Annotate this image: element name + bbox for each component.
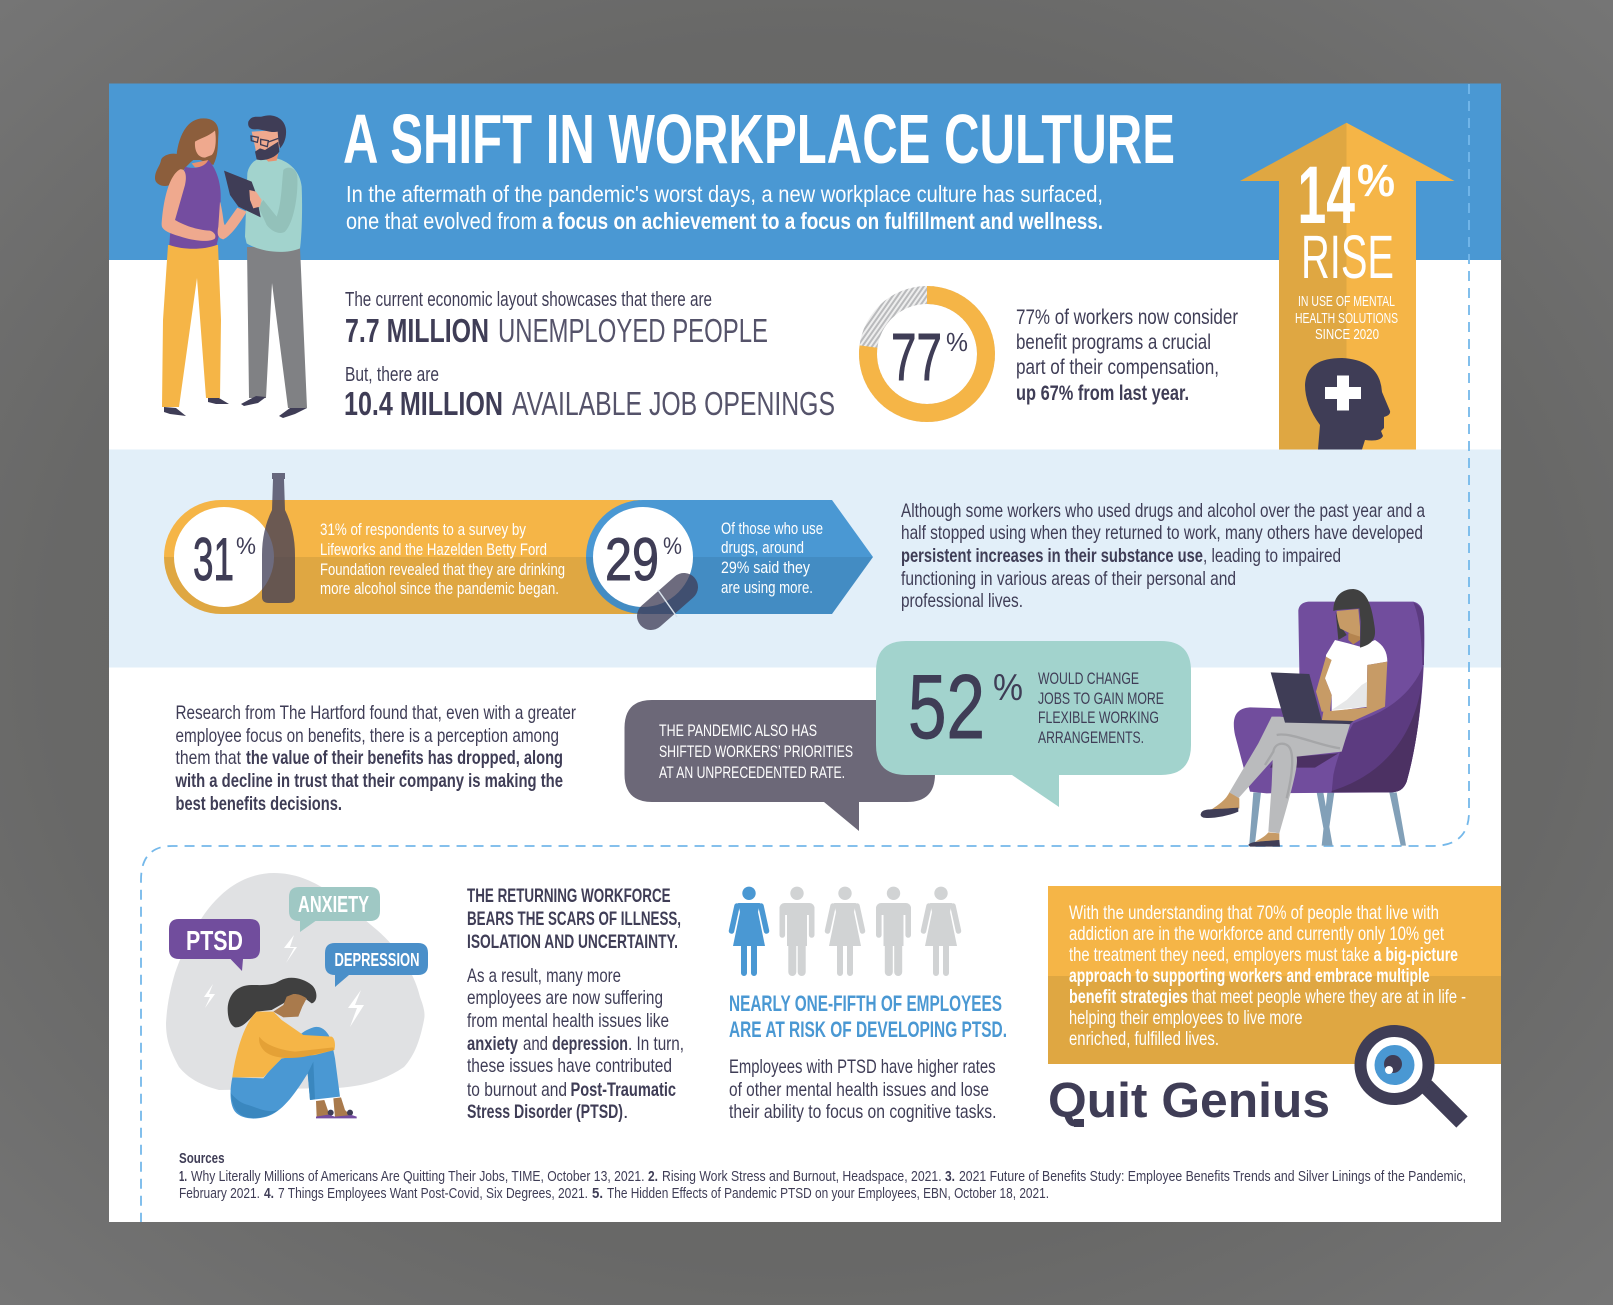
icon row: five people, one highlighted [732, 887, 958, 973]
stat: job market: AVAILABLE JOB OPENINGS [512, 385, 835, 422]
blob [166, 873, 425, 1090]
callout: ptsd: PTSD [186, 925, 243, 956]
text: substance use: , leading to impaired [1203, 545, 1341, 567]
text: 31% of respondents: Foundation revealed that they are drinking [320, 560, 565, 579]
text: sources: The Hidden Effects of Pandemic PTSD on your Employees, EBN, October 18, 2021. [607, 1185, 1049, 1202]
person: grey man [876, 887, 911, 972]
dashed connector line [141, 84, 1469, 1222]
person: grey woman [924, 887, 958, 973]
callout: anxiety: ANXIETY [298, 891, 369, 917]
panel: big-picture approach: that meet people where they are at in life - [1192, 987, 1466, 1008]
text: sources: 5. [592, 1185, 603, 1202]
arrow: 14% rise: % [1357, 155, 1395, 206]
text: substance use: functioning in various areas of their personal and [901, 568, 1236, 590]
text: returning workforce [467, 885, 684, 1123]
body: . In turn, [628, 1033, 684, 1055]
text: the Hartford research: the value of their benefits has dropped, along [246, 747, 563, 769]
arrow: 14% rise: HEALTH SOLUTIONS [1295, 310, 1398, 327]
callout: pandemic priorities [624, 700, 935, 831]
panel: big-picture approach: approach to supporting workers and embrace multiple [1069, 966, 1430, 987]
text: 31% of respondents: more alcohol since the pandemic began. [320, 579, 559, 598]
body: anxiety [467, 1033, 518, 1055]
person: blue woman [732, 887, 766, 973]
body: Stress Disorder (PTSD) [467, 1101, 623, 1123]
text: sources: 3. [945, 1168, 955, 1185]
text: sources: Rising Work Stress and Burnout, Headspace, 2021. [662, 1168, 942, 1185]
text: substance use: half stopped using when they returned to work, many others have developed [901, 522, 1423, 544]
text: the Hartford research [175, 702, 576, 815]
callout: 52% [876, 641, 1191, 807]
icon: capsule [651, 587, 684, 617]
panel: big-picture approach: the treatment they need, employers must take [1069, 945, 1370, 966]
panel: big-picture approach [1048, 886, 1501, 1064]
text: the Hartford research: with a decline in trust that their company is making the [175, 770, 563, 792]
arrow: 14% rise: RISE [1301, 223, 1394, 291]
callout: 52%: % [993, 667, 1023, 708]
body: . [623, 1101, 628, 1123]
callout: depression: DEPRESSION [334, 950, 420, 970]
text: sources: 4. [264, 1185, 274, 1202]
person: grey woman [828, 887, 862, 973]
icon: bottle [262, 473, 295, 603]
text: the Hartford research: employee focus on benefits, there is a perception among [176, 725, 559, 747]
text: sources: February 2021. [179, 1185, 260, 1202]
arrow: 14% rise: SINCE 2020 [1315, 326, 1379, 343]
callout: 52%: FLEXIBLE WORKING [1038, 708, 1159, 727]
circle: 31%: 31 [193, 526, 234, 593]
text: one-fifth of employees: ARE AT RISK OF DEVELOPING PTSD. [729, 1017, 1007, 1042]
callout: pandemic priorities: SHIFTED WORKERS’ PRIORITIES [659, 742, 853, 761]
panel: infographic card [109, 84, 1501, 1222]
person: grey man [780, 887, 814, 972]
stat: job market: UNEMPLOYED PEOPLE [498, 312, 768, 349]
panel: big-picture approach: a big-picture [1374, 945, 1458, 966]
text: of those who use: Of those who use [721, 519, 823, 538]
text: the Hartford research: best benefits decisions. [176, 793, 342, 815]
icon: head with plus [1305, 358, 1390, 450]
text: 31% of respondents: Lifeworks and the Hazelden Betty Ford [320, 540, 547, 559]
heading: ISOLATION AND UNCERTAINTY. [467, 931, 678, 953]
stat: job market: The current economic layout showcases that there are [345, 289, 712, 311]
body: from mental health issues like [467, 1010, 669, 1032]
circle: 31%: % [236, 533, 256, 560]
text: of those who use: 29% said they [721, 558, 810, 577]
text: 31% of respondents [320, 520, 565, 598]
callout: pandemic priorities: THE PANDEMIC ALSO HAS [659, 721, 817, 740]
panel: 29% drugs arrow [586, 500, 873, 617]
person [1201, 589, 1387, 847]
woman [155, 118, 247, 416]
text: 77% of workers: part of their compensation, [1016, 356, 1219, 379]
chart: 77% donut [868, 295, 986, 413]
text: the Hartford research: them that [176, 747, 241, 769]
panel: big-picture approach: helping their employees to live more [1069, 1008, 1302, 1029]
chart: 77% donut: % [946, 327, 968, 357]
figure [228, 978, 357, 1119]
stat: job market: 10.4 MILLION [344, 385, 503, 422]
text: the Hartford research: Research from The Hartford found that, even with a greater [176, 702, 576, 724]
chart: 77% donut: 77 [891, 320, 942, 395]
panel: header band [109, 84, 1501, 260]
callout: 52%: 52 [908, 657, 985, 758]
stat: job market [344, 289, 835, 422]
illustration: couple with tablet [155, 115, 307, 418]
text: sources [179, 1150, 1466, 1202]
circle: 31% [174, 507, 274, 607]
circle: 29%: 29 [605, 526, 659, 593]
text: of those who use [721, 519, 823, 597]
arrow: 14% rise [1240, 123, 1454, 449]
text: substance use: Although some workers who used drugs and alcohol over the past year and a [901, 500, 1425, 522]
text: sources: 1. [179, 1168, 187, 1185]
panel: big-picture approach: enriched, fulfilled lives. [1069, 1029, 1219, 1050]
callout: anxiety [289, 887, 380, 932]
stat: job market: But, there are [345, 364, 439, 386]
text: of those who use: are using more. [721, 578, 813, 597]
panel: big-picture approach: benefit strategies [1069, 987, 1188, 1008]
body [467, 965, 684, 1123]
illustration: anxious seated woman [166, 873, 428, 1119]
text: substance use: professional lives. [901, 590, 1023, 612]
text: substance use [901, 500, 1425, 612]
text: sources: Sources [179, 1150, 224, 1167]
body: to burnout and [467, 1079, 567, 1101]
icon: magnifying glass with eye [1360, 1031, 1462, 1122]
arrow: 14% rise: IN USE OF MENTAL [1298, 293, 1395, 310]
arrow: 14% rise: 14 [1298, 150, 1355, 241]
text: 77% of workers: benefit programs a crucial [1016, 331, 1211, 354]
body: As a result, many more [467, 965, 621, 987]
callout: ptsd [169, 919, 260, 971]
panel: big-picture approach: addiction are in the workforce and currently only 10% get [1069, 924, 1445, 945]
circle: 29% [593, 507, 693, 607]
body: depression [552, 1033, 628, 1055]
text: 31% of respondents: 31% of respondents to a survey by [320, 520, 526, 539]
body: Post-Traumatic [570, 1079, 676, 1101]
chair [1234, 602, 1424, 846]
subtitle: one that evolved from [346, 208, 537, 234]
panel: light blue band [109, 450, 1501, 668]
subtitle: a focus on achievement to a focus on fulfillment and wellness. [542, 208, 1103, 234]
body: and [523, 1033, 548, 1055]
heading: BEARS THE SCARS OF ILLNESS, [467, 908, 681, 930]
stat: job market: 7.7 MILLION [345, 312, 489, 349]
text: sources: Why Literally Millions of Americans Are Quitting Their Jobs, TIME, October 13, 2021. [191, 1168, 644, 1185]
subtitle [346, 181, 1103, 234]
callout: 52%: ARRANGEMENTS. [1038, 728, 1144, 747]
text: 77% of workers: 77% of workers now consider [1016, 306, 1238, 329]
text: sources: 7 Things Employees Want Post-Covid, Six Degrees, 2021. [278, 1185, 588, 1202]
text: 77% of workers: up 67% from last year. [1016, 382, 1189, 405]
text: one-fifth of employees: their ability to focus on cognitive tasks. [729, 1101, 996, 1123]
body: employees are now suffering [467, 987, 663, 1009]
text: one-fifth of employees: Employees with PTSD have higher rates [729, 1056, 996, 1078]
callout: pandemic priorities: AT AN UNPRECEDENTED RATE. [659, 763, 845, 782]
circle: 29%: % [663, 533, 682, 560]
callout: depression [325, 943, 428, 987]
body: these issues have contributed [467, 1055, 672, 1077]
man [224, 115, 307, 418]
panel: 31% alcohol pill [164, 473, 640, 614]
text: sources: 2021 Future of Benefits Study: Employee Benefits Trends and Silver Linings of the Pandemic, [959, 1168, 1466, 1185]
icon: lightning bolts [204, 935, 364, 1027]
text: substance use: persistent increases in their substance use [901, 545, 1203, 567]
callout: 52%: WOULD CHANGE [1038, 669, 1139, 688]
panel: big-picture approach: With the understanding that 70% of people that live with [1069, 903, 1439, 924]
text: one-fifth of employees: NEARLY ONE-FIFTH OF EMPLOYEES [729, 991, 1002, 1016]
title: A SHIFT IN WORKPLACE CULTURE [343, 100, 1175, 178]
heading [467, 885, 681, 953]
logo: Quit Genius wordmark: Quit Genius [1048, 1074, 1330, 1128]
text: 77% of workers [1016, 306, 1238, 405]
callout: 52%: JOBS TO GAIN MORE [1038, 689, 1164, 708]
text: of those who use: drugs, around [721, 538, 804, 557]
text: one-fifth of employees [729, 991, 1007, 1123]
subtitle: In the aftermath of the pandemic's worst days, a new workplace culture has surfaced, [346, 181, 1103, 207]
illustration: woman on armchair with laptop [1201, 589, 1424, 847]
text: one-fifth of employees: of other mental health issues and lose [729, 1079, 989, 1101]
text: sources: 2. [648, 1168, 658, 1185]
heading: THE RETURNING WORKFORCE [467, 885, 671, 907]
